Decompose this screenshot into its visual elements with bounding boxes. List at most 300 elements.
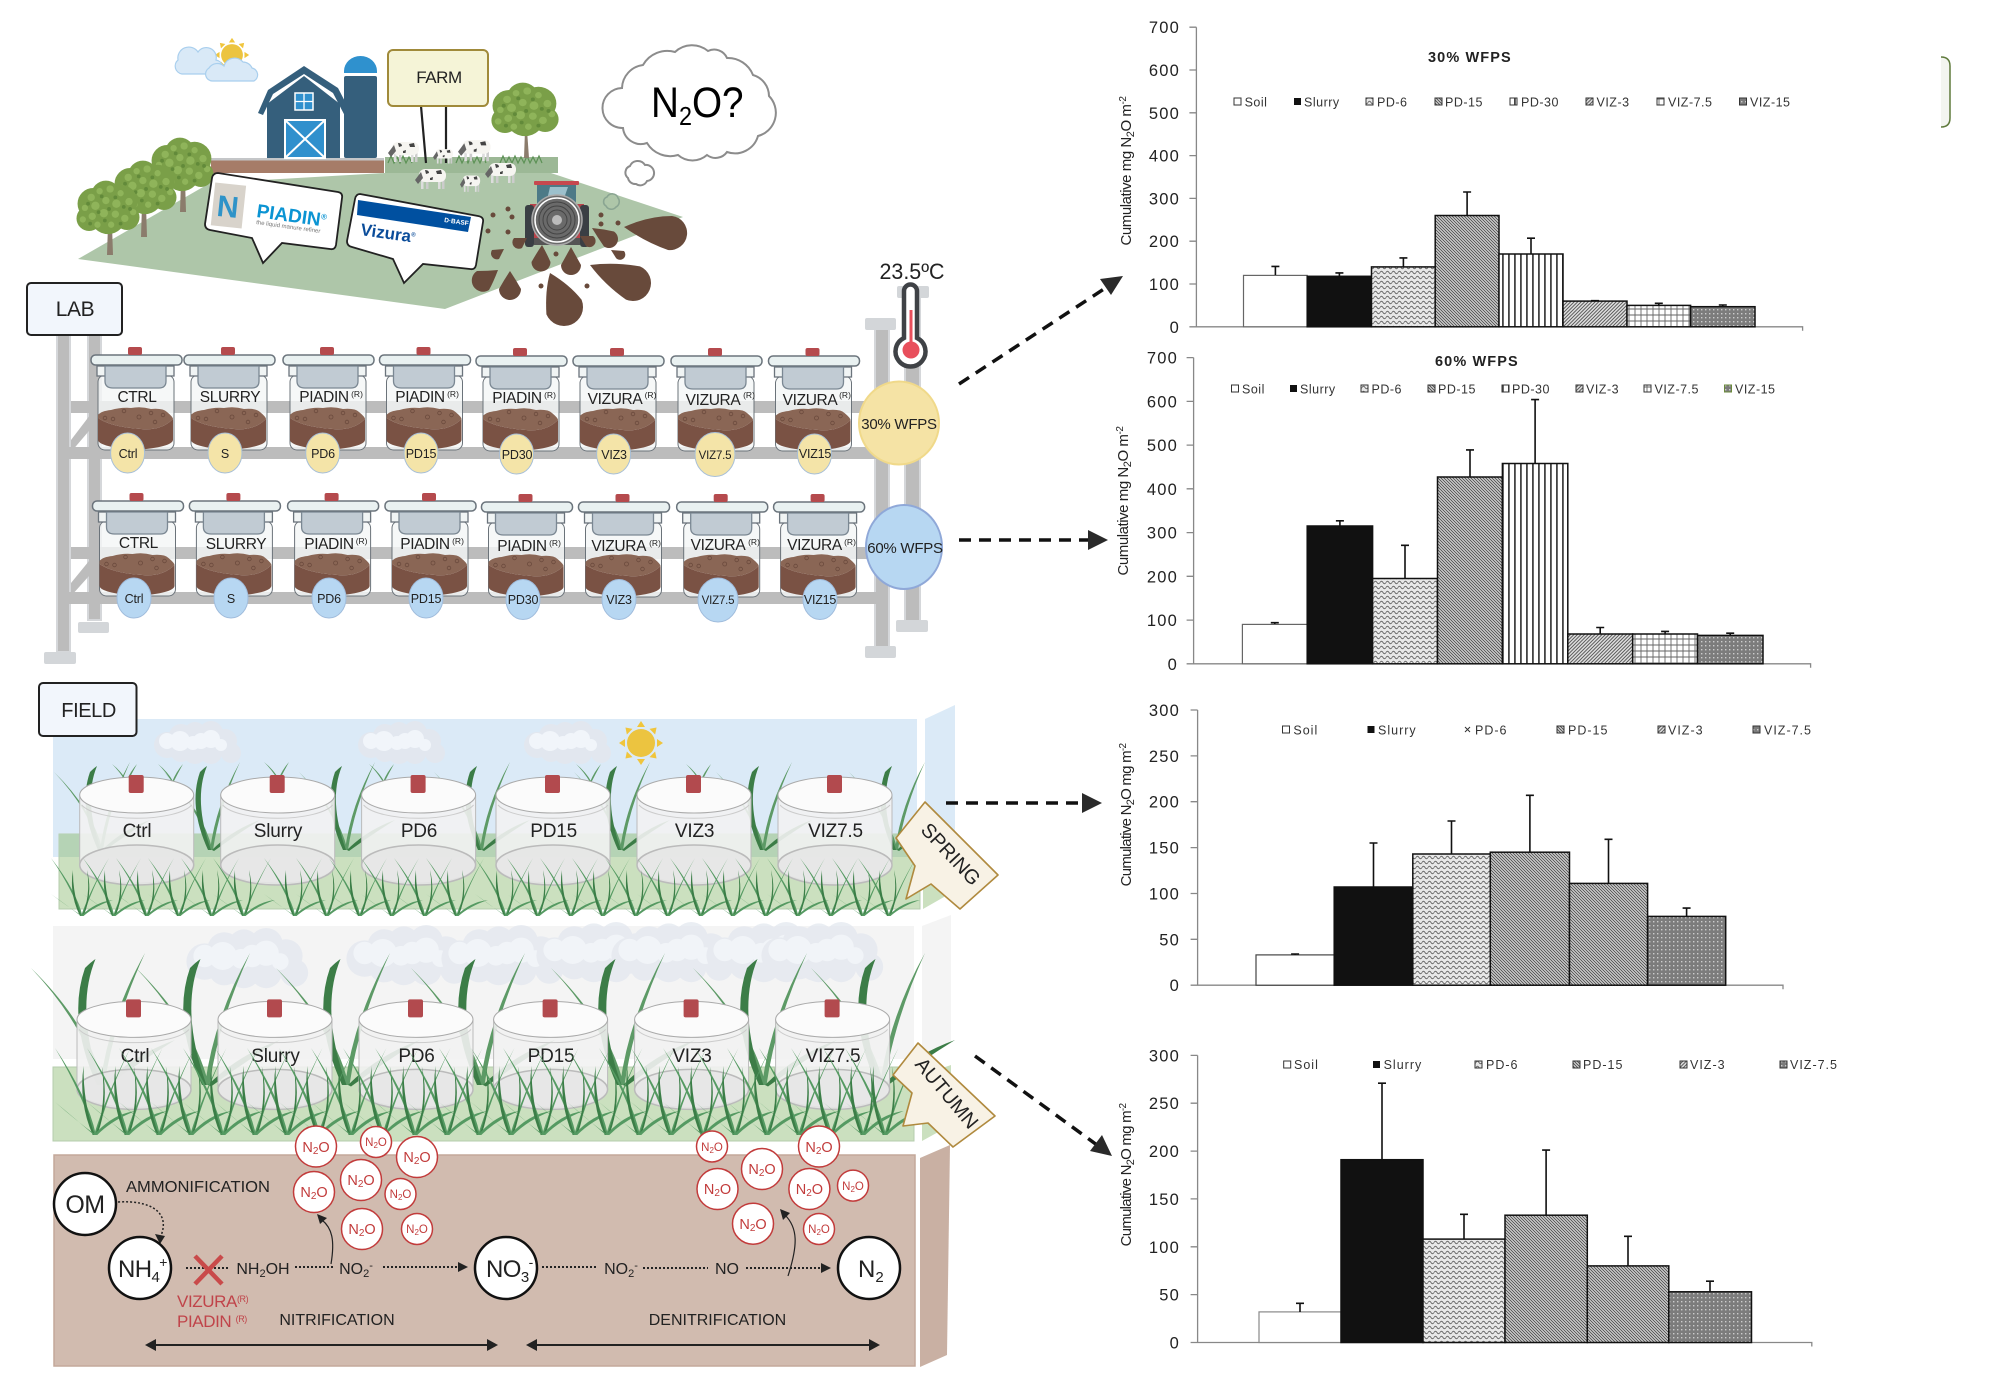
panel: FIELD spring <box>51 705 955 916</box>
jar: VIZ3 30: (R) <box>645 390 657 400</box>
y axis title: Cumulative mg N <box>1118 137 1135 245</box>
callout: PIADIN: N <box>215 190 240 225</box>
panel: soil nitrogen cycle <box>54 1126 950 1367</box>
icon: cows <box>388 140 516 192</box>
y tick labels: 700 <box>1147 350 1178 368</box>
y tick labels: 200 <box>1147 568 1178 586</box>
jar: PD30 30 <box>476 348 567 474</box>
jar: PD6 60: PIADIN <box>304 536 354 553</box>
node: NH4+: + <box>159 1254 167 1270</box>
label: NO2- nitrification: 2 <box>363 1268 369 1280</box>
legend <box>1282 724 1812 738</box>
label box: FIELD <box>39 683 136 736</box>
y axis title: -2 <box>1118 742 1129 751</box>
icon: manure splashes <box>472 206 687 326</box>
node: NH4+: 4 <box>151 1269 159 1286</box>
N2O bubbles: denitrification: 2 <box>714 1188 720 1199</box>
jar: PD15 60 <box>385 493 476 618</box>
jar: SLURRY 30: SLURRY <box>200 389 260 406</box>
icon: tractor <box>525 181 589 247</box>
jar: PD15 60: PIADIN <box>400 536 450 553</box>
panel side <box>922 915 951 1141</box>
jar: PD30 30: PD30 <box>502 448 532 462</box>
node: N2: N <box>858 1256 875 1283</box>
label: ammonification: AMMONIFICATION <box>126 1179 270 1196</box>
N2O bubbles: denitrification: O <box>755 1217 767 1233</box>
chamber: PD15: PD15 <box>528 1046 574 1067</box>
jar: CTRL 60: Ctrl <box>125 592 143 606</box>
bars <box>1242 464 1763 664</box>
label: NO: NO <box>715 1261 739 1278</box>
y axis title: -2 <box>1115 426 1126 435</box>
N2O bubbles: nitrification: N <box>403 1150 414 1166</box>
axes <box>1191 710 1783 989</box>
rack frame <box>44 286 929 664</box>
thought cloud: N2O? <box>602 45 776 185</box>
bars <box>1256 852 1726 985</box>
N2O bubbles: denitrification: N <box>796 1182 806 1198</box>
legend: PD-6 <box>1377 96 1407 110</box>
y tick labels: 250 <box>1149 748 1180 766</box>
clouds <box>186 922 883 988</box>
chamber: PD15 <box>494 999 608 1109</box>
N2O bubbles: nitrification: O <box>378 1137 387 1149</box>
jar: VIZ7.5 30: VIZ7.5 <box>699 450 731 462</box>
chamber: Ctrl <box>77 999 191 1109</box>
jar: VIZ7.5 60: VIZURA <box>691 537 746 554</box>
N2O bubbles: denitrification: 2 <box>759 1168 765 1179</box>
N2O bubbles: nitrification: 2 <box>358 1179 364 1190</box>
legend: Soil <box>1293 724 1318 738</box>
jar: SLURRY 60: SLURRY <box>206 536 266 553</box>
chamber: VIZ3: VIZ3 <box>675 821 714 842</box>
label: 30% WFPS: 30% WFPS <box>861 416 937 433</box>
label: NO2- nitrification: - <box>369 1260 373 1272</box>
node: NO3- <box>475 1237 537 1299</box>
callout: Vizura: ® <box>411 231 417 239</box>
bars <box>1259 1160 1752 1342</box>
label: NO2- denitrification: 2 <box>628 1268 634 1280</box>
jar: PD6 30: (R) <box>351 389 363 399</box>
jar: PD15 30: (R) <box>447 389 459 399</box>
jar: CTRL 30: CTRL <box>117 389 157 406</box>
icon: clouds <box>175 47 258 81</box>
y tick labels <box>1149 702 1180 995</box>
jar: CTRL 30 <box>91 347 182 473</box>
legend: PD-6 <box>1486 1058 1518 1072</box>
chamber: Ctrl: Ctrl <box>123 821 151 842</box>
jar: VIZ3 60: VIZ3 <box>606 593 632 607</box>
legend: PD-30 <box>1521 96 1559 110</box>
y tick labels <box>1147 350 1178 674</box>
sky <box>53 926 914 1059</box>
arrow: lab 30% to chart <box>959 276 1123 384</box>
N2O bubbles: denitrification: N <box>701 1142 709 1154</box>
jar: VIZ15 60: (R) <box>844 537 856 547</box>
jar: VIZ15 60: VIZURA <box>787 537 843 554</box>
N2O bubbles: nitrification: O <box>363 1173 375 1189</box>
jar: PD15 30: PD15 <box>406 447 436 461</box>
N2O bubbles: denitrification <box>696 1126 868 1244</box>
jar: VIZ15 30: VIZURA <box>783 392 838 409</box>
node: OM <box>54 1173 116 1235</box>
pathway dotted lines <box>295 1267 823 1268</box>
jar: VIZ7.5 30 <box>671 348 762 476</box>
legend: Soil <box>1245 96 1267 110</box>
jar: VIZ7.5 60 <box>677 494 768 622</box>
N2O bubbles: nitrification: O <box>316 1185 328 1201</box>
label: nitrification: NITRIFICATION <box>279 1312 395 1329</box>
jar: VIZ3 60: VIZURA <box>591 538 647 555</box>
node: NO3-: - <box>529 1254 534 1270</box>
legend <box>1234 96 1791 110</box>
legend <box>1284 1058 1838 1072</box>
panel side <box>923 705 955 909</box>
jar: CTRL 60: CTRL <box>119 535 159 552</box>
label: NO2- denitrification: NO <box>604 1261 628 1278</box>
foreground grass <box>51 858 920 916</box>
arrow: denitrification N2O <box>780 1209 795 1276</box>
jar: PD6 30 <box>283 347 374 473</box>
legend: PD-6 <box>1372 382 1402 396</box>
legend: VIZ-3 <box>1586 382 1619 396</box>
y tick labels: 0 <box>1170 977 1180 995</box>
legend: VIZ-3 <box>1690 1058 1726 1072</box>
label: NH2OH: NH <box>236 1261 259 1278</box>
label: 60% WFPS: 60% WFPS <box>867 540 943 557</box>
y tick labels: 0 <box>1168 656 1178 674</box>
N2O bubbles: denitrification: N <box>748 1162 759 1178</box>
callout: PIADIN: PIADIN <box>255 201 322 231</box>
ground <box>59 834 920 909</box>
sign: SPRING: SPRING <box>916 819 984 890</box>
error bars <box>1296 1083 1714 1312</box>
jar: SLURRY 60 <box>189 493 280 618</box>
sign: FARM <box>388 50 488 163</box>
thought cloud: N2O?: O? <box>692 78 744 126</box>
y tick labels: 500 <box>1149 105 1180 123</box>
jar: VIZ7.5 30: (R) <box>743 390 755 400</box>
N2O bubbles: nitrification: 2 <box>373 1141 378 1150</box>
jar: PD15 30 <box>380 347 470 473</box>
label: NH2OH: 2 <box>259 1268 266 1280</box>
arrow: spring to chart <box>946 793 1102 813</box>
ground <box>53 1067 914 1141</box>
callout: PIADIN <box>205 173 342 263</box>
y tick labels: 100 <box>1149 276 1180 294</box>
jar: VIZ15 30 <box>768 348 860 474</box>
clouds <box>154 721 611 764</box>
N2O bubbles: nitrification: N <box>300 1185 311 1201</box>
N2O bubbles: denitrification: 2 <box>806 1188 812 1199</box>
y axis title: Cumulative N <box>1118 805 1135 886</box>
callout: Vizura: Vizura <box>359 220 412 246</box>
y tick labels: 0 <box>1170 1334 1180 1352</box>
sign: SPRING <box>896 802 998 909</box>
legend: VIZ-7.5 <box>1668 96 1712 110</box>
legend: VIZ-15 <box>1735 382 1776 396</box>
y tick labels <box>1149 19 1180 337</box>
N2O bubbles: denitrification: N <box>704 1182 714 1198</box>
chamber: Ctrl: Ctrl <box>121 1046 149 1067</box>
background grass <box>54 762 945 851</box>
node: OM: OM <box>65 1191 105 1219</box>
error bars <box>1291 795 1691 955</box>
N2O bubbles: nitrification: 2 <box>398 1193 403 1202</box>
legend: PD-15 <box>1583 1058 1623 1072</box>
panel: farm scene <box>76 38 687 326</box>
chamber: PD6: PD6 <box>401 821 437 842</box>
jar: SLURRY 30: S <box>221 447 229 461</box>
N2O bubbles: denitrification: O <box>821 1224 830 1236</box>
icon: tree right <box>491 83 559 158</box>
label: NH2OH: OH <box>266 1261 290 1278</box>
chamber: VIZ7.5: VIZ7.5 <box>806 1046 860 1067</box>
y axis title: 2 <box>1125 1159 1137 1165</box>
N2O bubbles: nitrification: N <box>390 1189 398 1201</box>
label: inhibitors: (R) <box>236 1314 247 1324</box>
y tick labels: 500 <box>1147 437 1178 455</box>
chamber: VIZ7.5 <box>778 775 892 885</box>
N2O bubbles: denitrification: 2 <box>816 1228 821 1237</box>
arrowheads <box>458 1262 831 1273</box>
y axis title: O m <box>1118 105 1135 132</box>
y tick labels: 100 <box>1149 886 1180 904</box>
y tick labels <box>1149 1047 1180 1352</box>
chamber: Slurry: Slurry <box>251 1046 300 1067</box>
y axis title: Cumulative N <box>1118 1165 1135 1246</box>
panel: FIELD autumn <box>31 915 955 1141</box>
icon: silo <box>344 56 377 158</box>
y tick labels: 50 <box>1159 1287 1180 1305</box>
jar: CTRL 30: Ctrl <box>119 447 137 461</box>
icon: small green puff <box>604 194 619 209</box>
panel: LAB rack <box>44 259 945 664</box>
N2O bubbles: denitrification: N <box>808 1224 816 1236</box>
jar: PD30 30: (R) <box>544 390 556 400</box>
background grass <box>31 953 955 1086</box>
chamber: VIZ3 <box>635 999 749 1109</box>
jar: CTRL 60 <box>92 493 184 618</box>
y axis title: O mg m <box>1118 1111 1135 1160</box>
chamber: Slurry <box>221 775 335 885</box>
soil block <box>54 1145 950 1367</box>
y tick labels: 200 <box>1149 794 1180 812</box>
chamber: VIZ3 <box>637 775 751 885</box>
sky <box>53 719 917 857</box>
N2O bubbles: nitrification: O <box>364 1222 376 1238</box>
arrow: lab 60% to chart <box>959 530 1108 550</box>
y tick labels: 200 <box>1149 1143 1180 1161</box>
N2O bubbles: nitrification: 2 <box>414 1228 419 1237</box>
N2O bubbles: denitrification: N <box>805 1140 816 1156</box>
node: NH4+: NH <box>118 1256 151 1283</box>
label: inhibitors: PIADIN <box>177 1312 231 1331</box>
N2O bubbles: denitrification: 2 <box>750 1223 756 1234</box>
icon: trees left <box>76 138 214 255</box>
chamber: Slurry <box>218 999 332 1109</box>
legend: VIZ-3 <box>1596 96 1630 110</box>
y tick labels: 300 <box>1149 702 1180 720</box>
N2O bubbles: denitrification: N <box>842 1181 850 1193</box>
jar: PD30 60: (R) <box>549 538 561 548</box>
chamber: PD6 <box>362 775 476 885</box>
axes <box>1187 358 1811 668</box>
chamber: PD6: PD6 <box>398 1046 435 1067</box>
bar chart: spring <box>1118 702 1812 995</box>
legend: VIZ-7.5 <box>1790 1058 1838 1072</box>
y tick labels: 150 <box>1149 840 1180 858</box>
y axis title: -2 <box>1118 96 1129 105</box>
inhibition mark <box>186 1256 230 1284</box>
legend <box>1232 382 1776 396</box>
legend: PD-15 <box>1438 382 1476 396</box>
y tick labels: 600 <box>1147 393 1178 411</box>
legend: Soil <box>1242 382 1265 396</box>
chamber: PD6 <box>359 999 473 1109</box>
jar: SLURRY 30 <box>184 347 275 473</box>
error bars <box>1271 192 1727 306</box>
jar: PD6 30: PD6 <box>311 447 335 461</box>
N2O bubbles: nitrification: N <box>406 1224 414 1236</box>
N2O bubbles: denitrification: O <box>764 1162 776 1178</box>
thought cloud: N2O?: N <box>651 78 679 126</box>
label: denitrification: DENITRIFICATION <box>649 1312 786 1329</box>
jar: PD15 30: PIADIN <box>395 389 445 406</box>
legend: PD-15 <box>1445 96 1483 110</box>
node: NH4+ <box>109 1237 171 1299</box>
y tick labels: 600 <box>1149 62 1180 80</box>
legend: VIZ-7.5 <box>1764 724 1812 738</box>
legend: VIZ-15 <box>1750 96 1791 110</box>
callout: PIADIN: ® <box>320 212 328 222</box>
label box: LAB: LAB <box>56 298 94 321</box>
bar chart: 60% WFPS <box>1115 350 1811 674</box>
y tick labels: 400 <box>1149 148 1180 166</box>
jar: VIZ3 30: VIZURA <box>588 391 643 408</box>
y tick labels: 700 <box>1149 19 1180 37</box>
chamber: VIZ7.5 <box>776 999 890 1109</box>
y tick labels: 0 <box>1170 319 1180 337</box>
y tick labels: 50 <box>1159 931 1180 949</box>
jar: PD15 60: PD15 <box>411 592 441 606</box>
N2O bubbles: nitrification: O <box>402 1189 411 1201</box>
legend: VIZ-3 <box>1668 724 1704 738</box>
farm ground <box>78 166 683 309</box>
legend: VIZ-7.5 <box>1654 382 1699 396</box>
jar: VIZ3 60 <box>578 494 670 620</box>
N2O bubbles: nitrification: N <box>348 1222 359 1238</box>
arrow: OM to NH4 <box>118 1202 165 1244</box>
label: 30% WFPS <box>859 382 939 464</box>
N2O bubbles: denitrification: 2 <box>709 1146 714 1155</box>
jar: PD30 60: PIADIN <box>497 538 547 555</box>
N2O bubbles: nitrification: O <box>318 1140 330 1156</box>
thought cloud: N2O?: 2 <box>679 103 692 131</box>
chamber: PD15 <box>496 775 610 885</box>
sign: AUTUMN <box>893 1043 995 1147</box>
y tick labels: 300 <box>1147 525 1178 543</box>
jar: PD6 60 <box>288 493 379 618</box>
y tick labels: 150 <box>1149 1191 1180 1209</box>
chamber: Slurry: Slurry <box>254 821 303 842</box>
N2O bubbles: nitrification <box>294 1126 438 1250</box>
node: N2 <box>838 1237 900 1299</box>
icon: barn <box>258 66 352 158</box>
legend: Slurry <box>1300 382 1336 396</box>
arrow: nitrification span <box>145 1339 498 1351</box>
legend: PD-30 <box>1512 382 1550 396</box>
legend: Slurry <box>1378 724 1417 738</box>
N2O bubbles: denitrification: O <box>821 1140 833 1156</box>
y axis title: 2 <box>1125 799 1137 805</box>
jar: PD6 30: PIADIN <box>299 389 349 406</box>
jar: VIZ3 30 <box>573 348 664 474</box>
bars <box>1244 216 1755 327</box>
node: NO3-: NO <box>486 1256 521 1283</box>
legend: PD-6 <box>1475 724 1507 738</box>
label: inhibitors <box>177 1292 249 1331</box>
N2O bubbles: nitrification: 2 <box>313 1146 319 1157</box>
N2O bubbles: nitrification: O <box>419 1150 431 1166</box>
callout: Vizura: D·BASF <box>444 217 469 227</box>
jar: PD6 60: PD6 <box>317 592 341 606</box>
jar: VIZ15 30: VIZ15 <box>799 447 831 461</box>
arrow: autumn to chart <box>975 1056 1112 1156</box>
jar: PD30 30: PIADIN <box>492 390 542 407</box>
N2O bubbles: nitrification: 2 <box>414 1156 420 1167</box>
corner bracket outline <box>1941 57 1950 127</box>
icon: sun <box>215 38 249 72</box>
label: inhibitors: (R) <box>237 1294 249 1304</box>
N2O bubbles: denitrification: O <box>714 1142 723 1154</box>
jar: VIZ15 30: (R) <box>839 390 851 400</box>
jar: PD30 60 <box>482 494 572 620</box>
y axis title: 2 <box>1125 131 1137 137</box>
bar chart: autumn <box>1118 1047 1838 1352</box>
callout: Vizura <box>347 194 483 283</box>
y tick labels: 400 <box>1147 481 1178 499</box>
jar: VIZ15 60: VIZ15 <box>804 593 836 607</box>
legend: Slurry <box>1304 96 1340 110</box>
jar: VIZ3 60: (R) <box>649 538 661 548</box>
jar: VIZ7.5 60: (R) <box>748 537 760 547</box>
legend: Slurry <box>1384 1058 1422 1072</box>
y axis title: O m <box>1115 435 1132 462</box>
N2O bubbles: nitrification: N <box>365 1137 373 1149</box>
y tick labels: 300 <box>1149 1047 1180 1065</box>
N2O bubbles: nitrification: O <box>419 1224 428 1236</box>
sign: FARM: FARM <box>416 68 462 87</box>
jar: VIZ7.5 30: VIZURA <box>686 392 741 409</box>
N2O bubbles: denitrification: 2 <box>850 1185 855 1194</box>
jar: PD15 60: (R) <box>452 536 464 546</box>
icon: thermometer <box>896 285 926 367</box>
chamber: VIZ7.5: VIZ7.5 <box>808 821 863 842</box>
barn foundation <box>211 158 384 173</box>
chart title: 30% WFPS <box>1428 50 1512 66</box>
legend: PD-15 <box>1568 724 1608 738</box>
y axis title: 2 <box>1122 461 1134 467</box>
N2O bubbles: denitrification: O <box>855 1181 864 1193</box>
callout: PIADIN: the liquid manure refiner <box>256 220 321 235</box>
jar: VIZ15 60 <box>774 494 865 620</box>
N2O bubbles: denitrification: O <box>720 1182 731 1198</box>
jar: PD30 60: PD30 <box>508 593 538 607</box>
chamber: PD15: PD15 <box>530 821 577 842</box>
foreground grass <box>55 1048 926 1135</box>
y tick labels: 100 <box>1149 1239 1180 1257</box>
